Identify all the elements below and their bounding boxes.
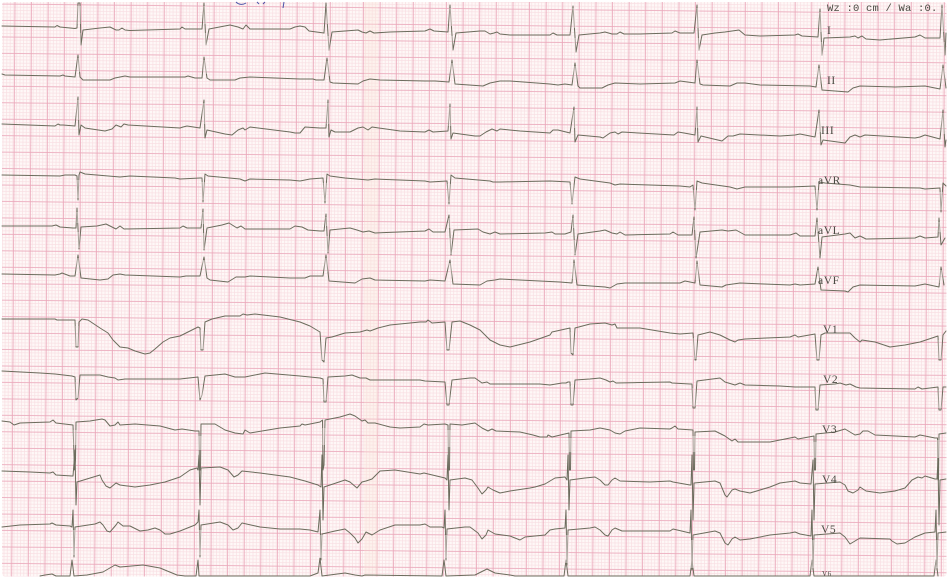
label: V1: V1: [823, 324, 838, 336]
text: settings header: Wz :0 cm / Wa :0.: [827, 3, 938, 15]
label: V4: V4: [822, 474, 837, 486]
trace: lead V5: [2, 510, 946, 570]
label: V2: V2: [823, 374, 838, 386]
trace: lead II: [2, 55, 946, 92]
label: aVR: aVR: [818, 175, 841, 187]
label: aVL: aVL: [818, 225, 840, 237]
label: V3: V3: [822, 424, 837, 436]
trace: lead V6: [40, 558, 938, 576]
label: I: I: [827, 25, 831, 37]
trace: lead III: [2, 97, 946, 147]
trace: lead V2: [2, 371, 946, 410]
trace: lead I: [2, 3, 946, 55]
trace: lead V1: [2, 314, 946, 362]
label: III: III: [821, 125, 834, 137]
label: V6: V6: [822, 570, 832, 578]
trace: lead aVL: [2, 208, 945, 258]
label: V5: V5: [821, 524, 836, 536]
trace: lead aVF: [2, 255, 944, 292]
label: aVF: aVF: [818, 275, 840, 287]
trace: lead aVR: [2, 172, 946, 212]
handwritten ink mark: [236, 2, 284, 8]
trace: lead V3: [2, 414, 946, 480]
lead and calibration labels: [818, 3, 938, 578]
label: II: II: [827, 75, 836, 87]
trace: lead V4: [2, 450, 946, 525]
